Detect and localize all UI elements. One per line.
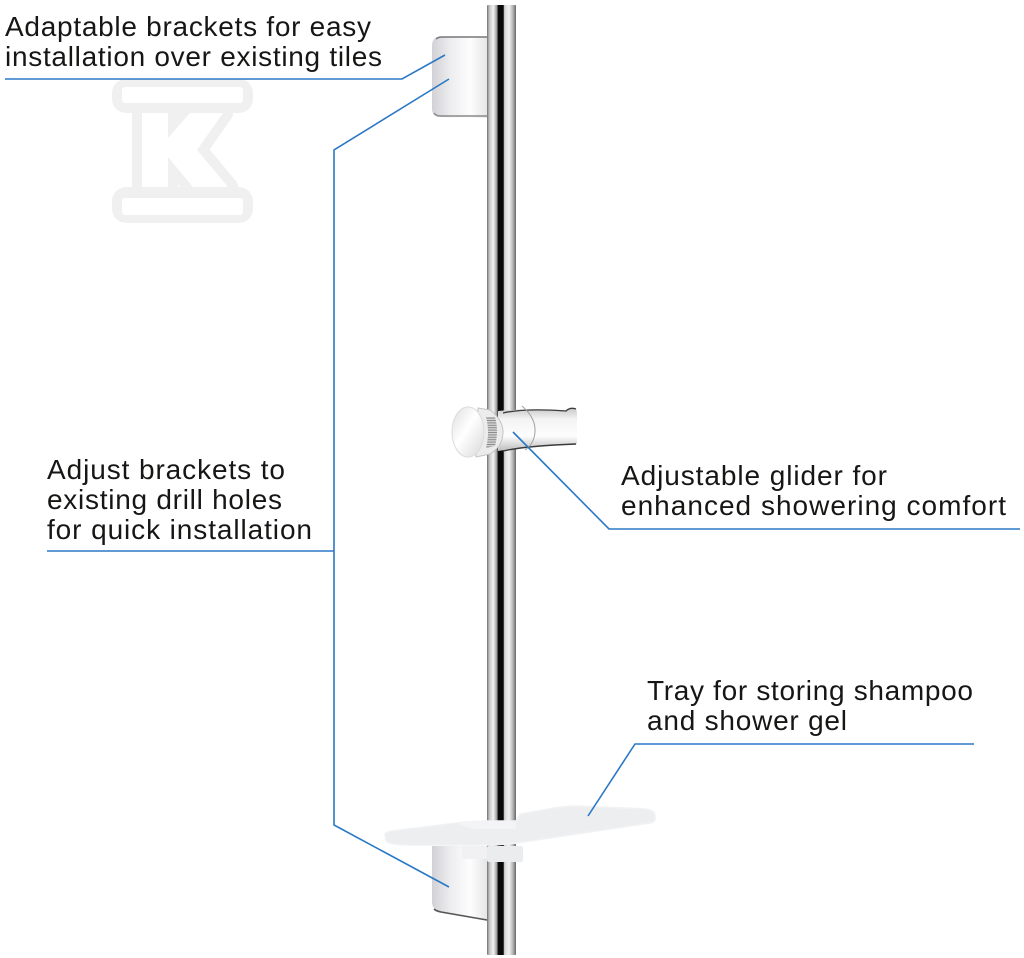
callout: tray	[588, 675, 974, 816]
callout: adjustable glider: Adjustable glider for	[621, 460, 887, 491]
callout: adjust brackets to drill holes: existing drill holes	[47, 484, 282, 515]
callout: adjust brackets to drill holes	[47, 79, 449, 887]
callout: adaptable brackets	[5, 11, 445, 79]
callout: adjustable glider	[513, 432, 1020, 529]
callout: adjust brackets to drill holes: Adjust brackets to	[47, 454, 285, 485]
bottom wall bracket	[432, 846, 487, 921]
watermark: K logo	[112, 79, 253, 223]
callout: tray: Tray for storing shampoo	[647, 675, 973, 706]
callout: adjustable glider: enhanced showering comfort	[621, 490, 1006, 521]
chrome rail	[487, 5, 516, 955]
callout: adaptable brackets: installation over existing tiles	[5, 41, 382, 72]
callout: adaptable brackets: Adaptable brackets for easy	[5, 11, 371, 42]
adjustable glider	[452, 406, 577, 457]
callout: adjust brackets to drill holes: for quick installation	[47, 514, 312, 545]
soap tray	[385, 806, 655, 862]
top wall bracket	[432, 37, 487, 118]
callout: tray: and shower gel	[647, 705, 847, 736]
